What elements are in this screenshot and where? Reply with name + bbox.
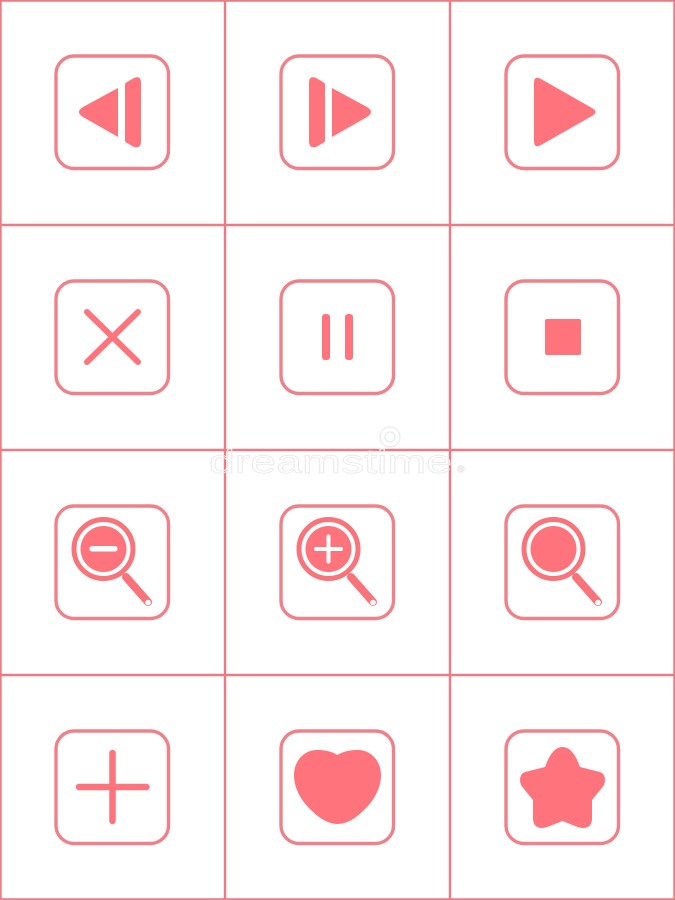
watermark (209, 427, 465, 480)
icon: star (506, 731, 618, 844)
icon: zoom in (281, 506, 394, 618)
icon: rewind (56, 56, 168, 168)
icon: add (56, 731, 168, 844)
icon: close (56, 281, 168, 394)
icon: pause (281, 281, 394, 394)
icon: play (506, 56, 618, 168)
icon: zoom out (56, 506, 168, 618)
icon: heart (281, 731, 394, 844)
icon: stop (506, 281, 618, 394)
icon: search (506, 506, 618, 618)
watermark: dreamstime (209, 443, 452, 480)
icon: fast forward (281, 56, 394, 168)
